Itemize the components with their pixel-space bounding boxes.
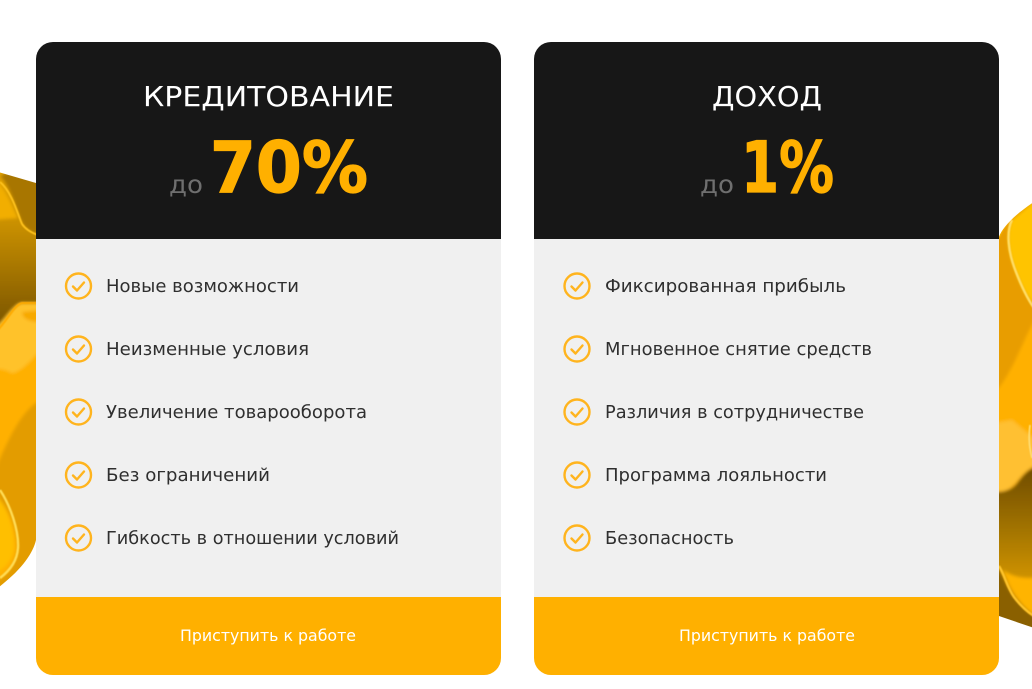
figure: up to 1 percent bbox=[700, 127, 834, 209]
panel: income bbox=[534, 42, 999, 675]
list item: unchanged terms bbox=[66, 336, 309, 362]
list item: cooperation differences: Различия в сотрудничестве bbox=[605, 402, 864, 423]
list item: no limits: Без ограничений bbox=[106, 465, 270, 486]
list item: flexible terms: Гибкость в отношении условий bbox=[106, 528, 399, 549]
decoration: right liquid gold blob bbox=[999, 203, 1032, 628]
list item: loyalty program: Программа лояльности bbox=[605, 465, 827, 486]
decoration: left liquid gold blob bbox=[0, 172, 36, 586]
heading: lending: КРЕДИТОВАНИЕ bbox=[143, 80, 394, 113]
button: get started: Приступить к работе bbox=[679, 626, 855, 645]
list item: instant withdrawal: Мгновенное снятие средств bbox=[605, 339, 872, 360]
figure: up to 70 percent: до bbox=[169, 170, 203, 199]
list: income benefits bbox=[564, 274, 872, 550]
list item: no limits bbox=[66, 462, 270, 488]
list item: fixed profit: Фиксированная прибыль bbox=[605, 276, 846, 297]
list: lending benefits bbox=[66, 274, 399, 550]
list item: new opportunities: Новые возможности bbox=[106, 276, 299, 297]
list item: security: Безопасность bbox=[605, 528, 734, 549]
panel: lending bbox=[36, 42, 501, 675]
list item: turnover growth: Увеличение товарооборота bbox=[106, 402, 367, 423]
figure: up to 1 percent: 1% bbox=[741, 127, 834, 209]
lending card body bbox=[36, 42, 501, 675]
button: get started: Приступить к работе bbox=[180, 626, 356, 645]
income card body bbox=[534, 42, 999, 675]
heading: income: ДОХОД bbox=[712, 80, 822, 113]
list item: unchanged terms: Неизменные условия bbox=[106, 339, 309, 360]
list item: new opportunities bbox=[66, 274, 299, 298]
list item: security bbox=[564, 526, 734, 550]
figure: up to 70 percent: 70% bbox=[210, 127, 368, 209]
figure: up to 1 percent: до bbox=[700, 170, 734, 199]
